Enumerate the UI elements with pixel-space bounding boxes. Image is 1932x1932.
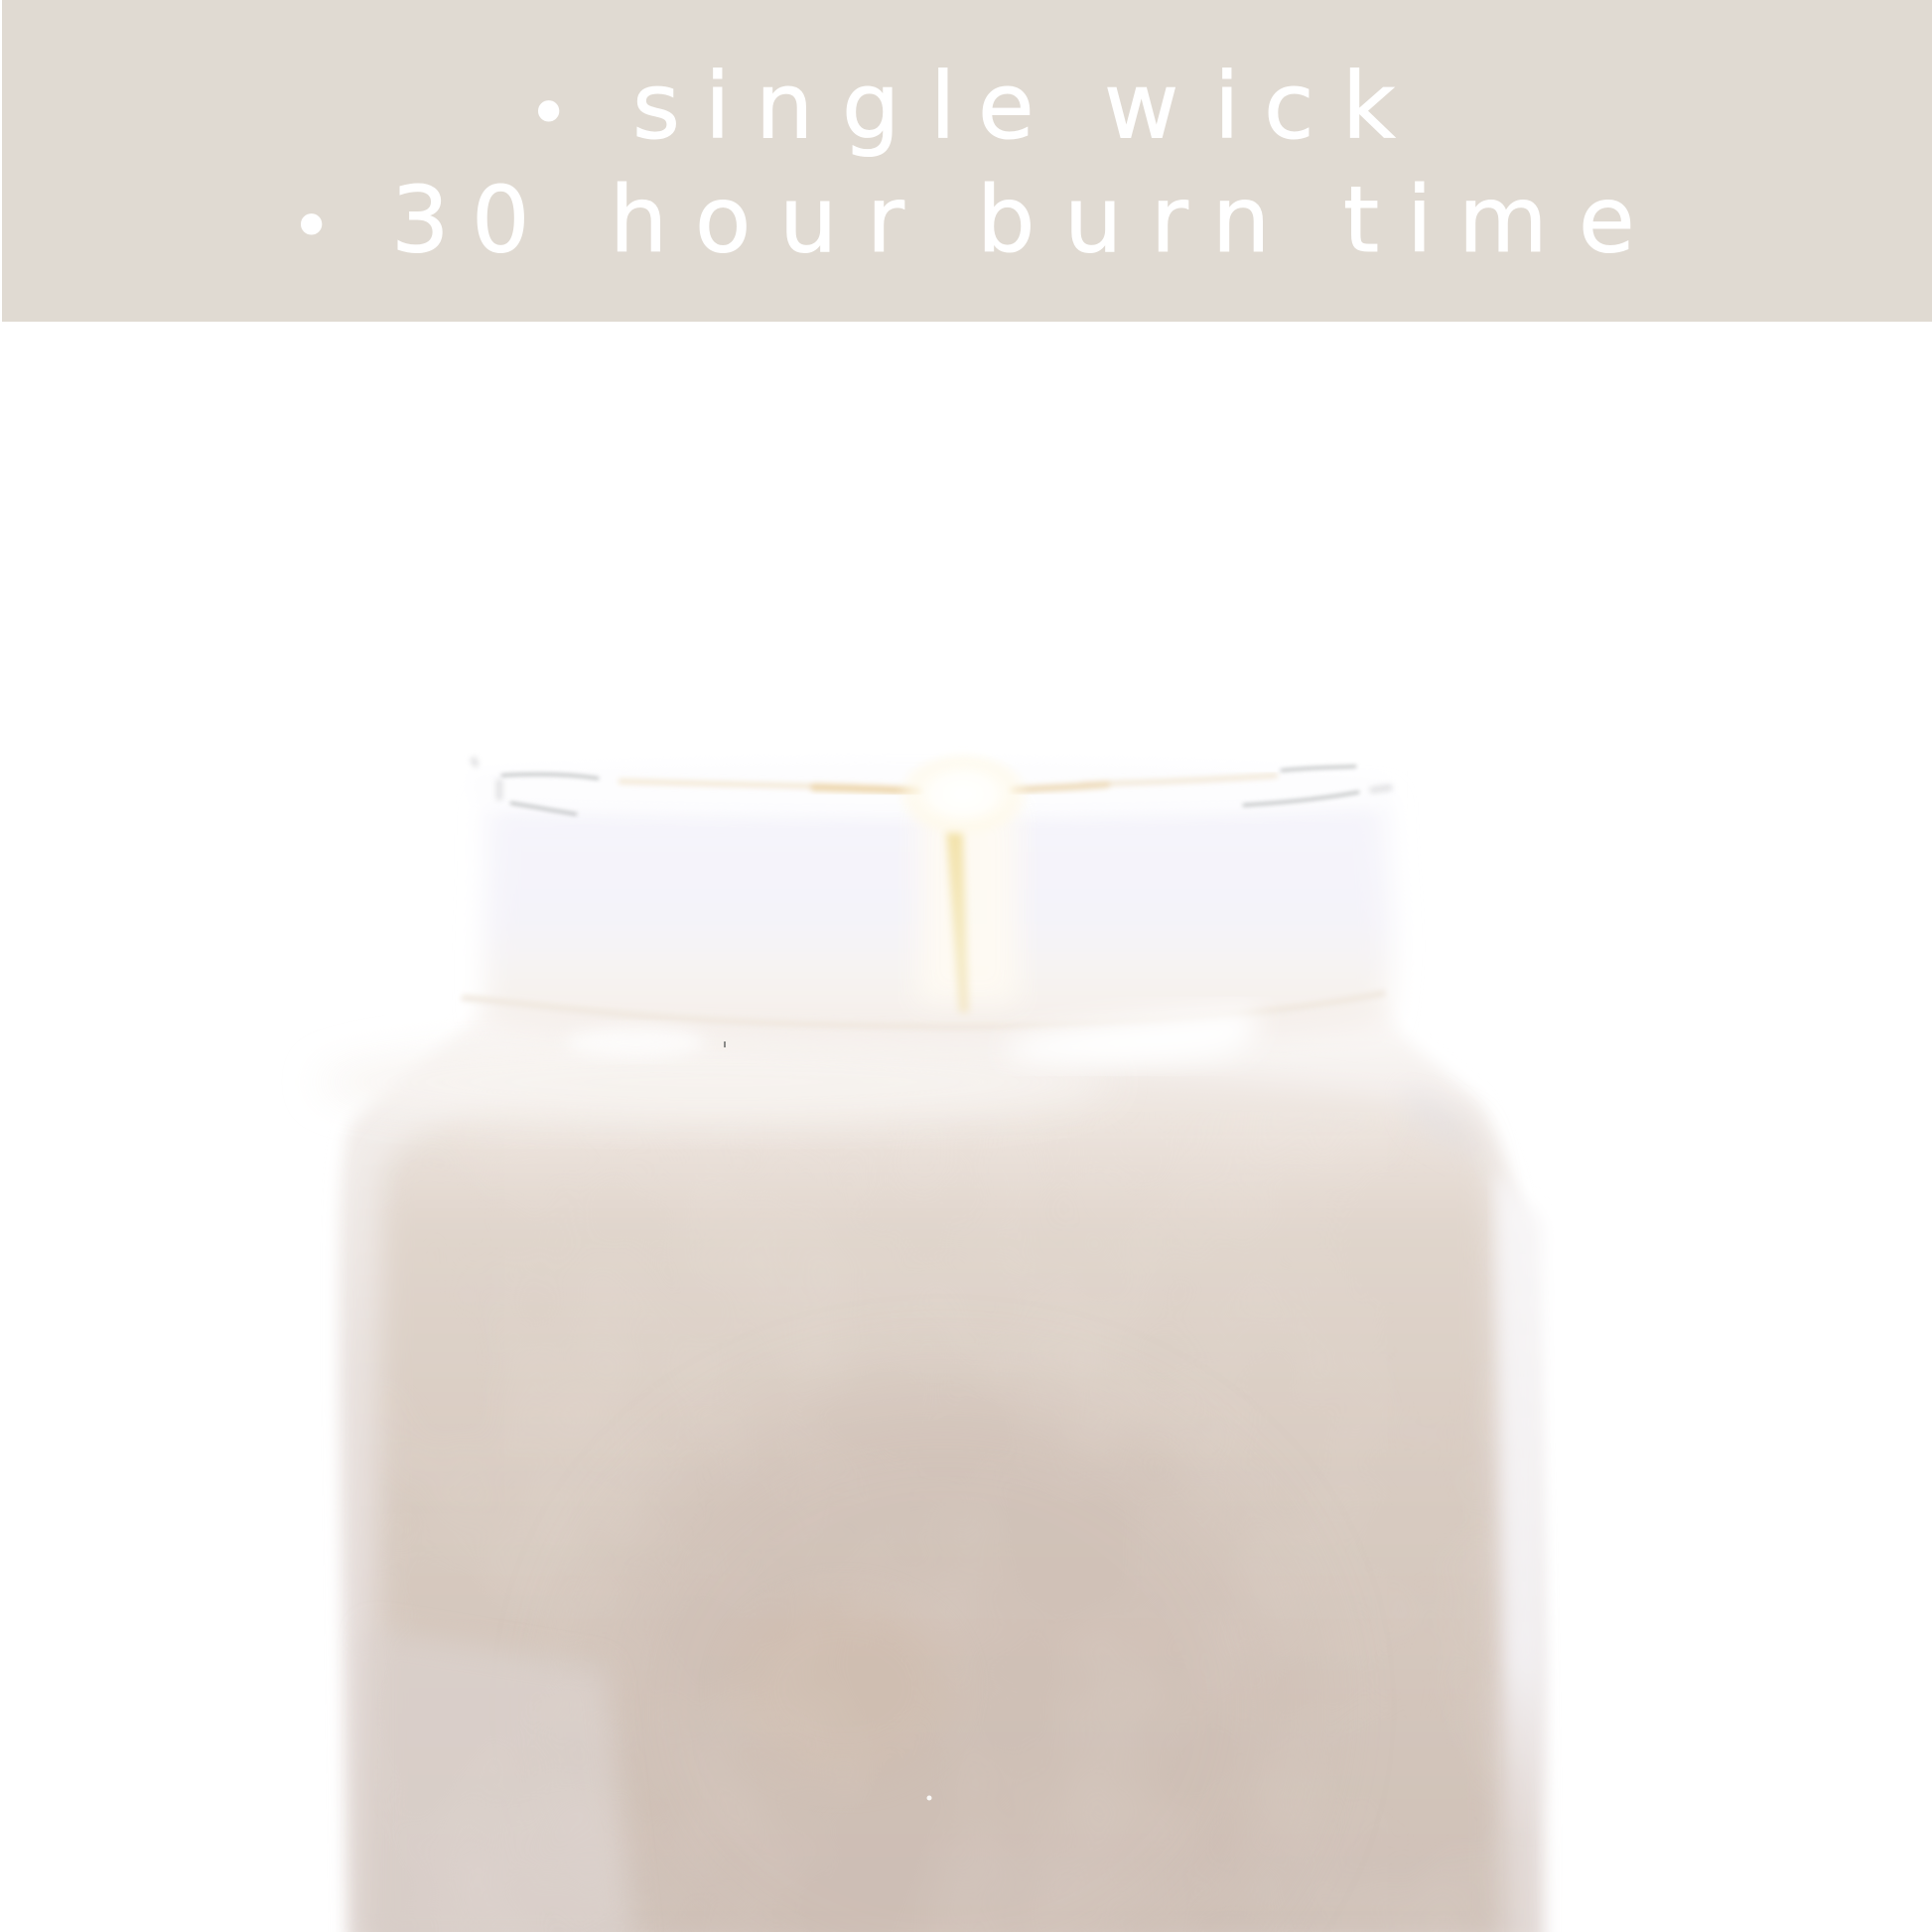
jar shoulder fade — [318, 1040, 1112, 1124]
rim dark lines — [502, 766, 1358, 814]
speck — [724, 1041, 726, 1047]
white speck — [927, 1795, 931, 1801]
feature: single wick: • — [528, 72, 569, 154]
wax tone: lighter lower left strip — [367, 1628, 635, 1932]
wick — [946, 831, 969, 1013]
header band — [2, 0, 1932, 322]
lower neck ring — [462, 993, 1385, 1027]
wax mottling — [367, 1112, 1509, 1932]
flame — [896, 751, 1031, 838]
left ring highlight — [566, 1027, 705, 1058]
rim gold line — [621, 775, 1276, 791]
candle jar — [318, 751, 1545, 1932]
shoulder shadow right — [1400, 1087, 1481, 1162]
rim left edge — [473, 758, 1392, 800]
wax fill — [372, 1062, 1504, 1932]
flame glow column — [918, 804, 1018, 1003]
glass edge right highlight — [1497, 1172, 1545, 1837]
feature: 30 hour burn time: • — [291, 186, 332, 267]
wax tone: darker lower centre — [586, 1390, 1301, 1932]
feature: 30 hour burn time: 30 hour burn time — [391, 167, 1635, 273]
rim — [467, 759, 1390, 816]
feature: single wick: single wick — [632, 54, 1396, 159]
wax tone: warm spot — [735, 1598, 953, 1777]
jar neck — [485, 799, 1392, 1044]
jar glass body — [340, 998, 1544, 1932]
neck highlight — [1008, 1008, 1257, 1064]
